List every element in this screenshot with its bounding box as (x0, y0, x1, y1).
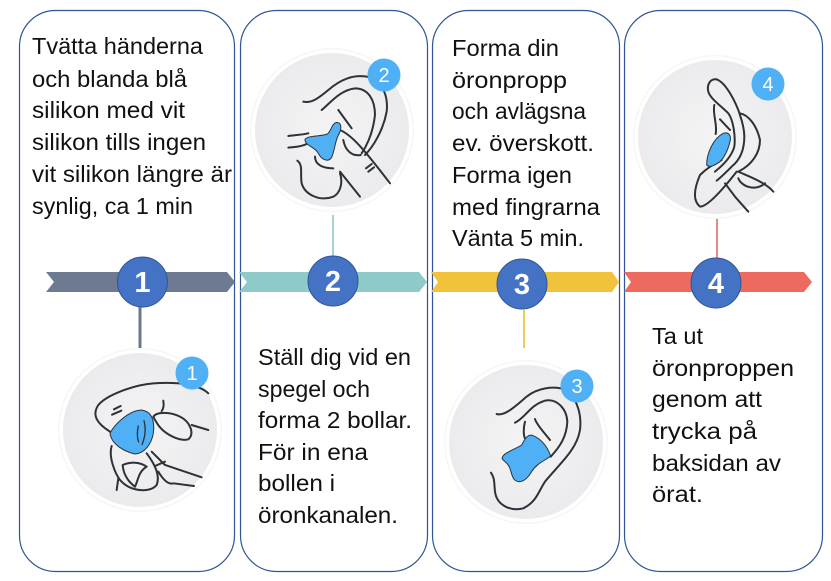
text: step 4 instructions: öronproppen (652, 355, 794, 381)
number badge 3 (497, 259, 547, 309)
text: step 3 instructions (452, 35, 601, 251)
panel: step 1 (20, 10, 234, 572)
connector: step 3 (523, 310, 525, 348)
text: step 3 instructions: Vänta 5 min. (452, 225, 584, 251)
text: step 4 instructions: genom att (652, 386, 762, 412)
text: step 4 instructions: örat. (652, 481, 703, 507)
text: step 2 instructions: spegel och (258, 376, 370, 402)
text: step 3 instructions: med fingrarna (452, 194, 601, 220)
text: step 4 instructions: baksidan av (652, 450, 781, 476)
text: step 1 instructions: och blanda blå (32, 66, 188, 92)
icon: step 1 fingers kneading silicone (58, 348, 222, 512)
number badge 4: 4 (708, 268, 724, 300)
text: step 3 instructions: Forma igen (452, 162, 572, 188)
icon: step 3 plug seated in ear (444, 360, 608, 524)
text: step 1 instructions: silikon tills ingen (32, 129, 206, 155)
arrow: step 1 (46, 272, 235, 292)
number badge 2 (308, 256, 358, 306)
text: step 2 instructions (258, 344, 412, 528)
text: step 1 instructions: vit silikon längre är (32, 161, 232, 187)
text: step 1 instructions (32, 33, 232, 219)
number badge 3: 3 (514, 269, 530, 301)
text: step 3 instructions: och avlägsna (452, 98, 587, 124)
number badge 1 (118, 257, 168, 307)
connector: step 2 (332, 215, 334, 260)
arrow: step 2 (239, 272, 427, 292)
connector: step 4 (716, 215, 718, 260)
arrow: step 4 (624, 272, 812, 292)
text: step 4 instructions (652, 323, 794, 507)
panel: step 2 (240, 10, 428, 572)
icon: step 4 pressing behind ear (633, 55, 797, 219)
connector: step 1 (138, 306, 142, 348)
text: step 2 instructions: bollen i (258, 470, 335, 496)
panel: step 3 (432, 10, 620, 572)
text: step 3 instructions: ev. överskott. (452, 130, 594, 156)
panel: step 4 (624, 10, 822, 572)
text: step 1 instructions: silikon med vit (32, 97, 185, 123)
number badge 4 (691, 258, 741, 308)
icon: step 3 plug seated in ear: 3 (571, 376, 583, 398)
text: step 3 instructions: Forma din (452, 35, 559, 61)
text: step 3 instructions: öronpropp (452, 67, 567, 93)
text: step 2 instructions: Ställ dig vid en (258, 344, 411, 370)
icon: step 2 finger inserting plug (250, 48, 414, 212)
number badge 1: 1 (134, 267, 151, 299)
arrow: step 3 (431, 272, 619, 292)
text: step 1 instructions: synlig, ca 1 min (32, 193, 193, 219)
icon: step 2 finger inserting plug: 2 (378, 65, 390, 87)
text: step 4 instructions: Ta ut (652, 323, 703, 349)
text: step 2 instructions: öronkanalen. (258, 502, 398, 528)
text: step 2 instructions: forma 2 bollar. (258, 407, 412, 433)
number badge 2: 2 (325, 266, 341, 298)
text: step 2 instructions: För in ena (258, 439, 369, 465)
icon: step 1 fingers kneading silicone: 1 (186, 363, 198, 385)
icon: step 4 pressing behind ear: 4 (762, 74, 774, 96)
text: step 1 instructions: Tvätta händerna (32, 33, 204, 59)
text: step 4 instructions: trycka på (652, 418, 758, 444)
